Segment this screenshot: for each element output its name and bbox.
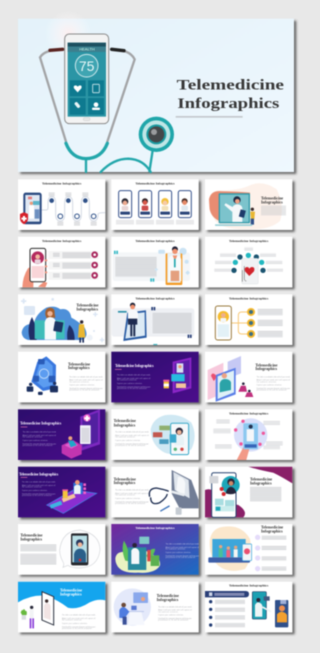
slide 8: doctor quote panel [111,294,199,345]
slide 6: circular icons [205,237,292,287]
slide grid [18,179,292,632]
title [176,77,285,118]
text rows [48,251,98,280]
lavender circle [114,588,151,626]
phone with doctor [71,533,88,565]
cloud and plus icons [155,248,190,275]
bullets [158,605,192,622]
bullets [257,375,291,392]
slide 20: gradient doctor scene [111,524,200,575]
doctor on tablet [118,303,147,341]
heading [261,195,283,205]
heading: Telemedicine Infographics [229,239,269,243]
hand and phone [237,423,258,460]
hero slide: Telemedicine Infographics [18,10,294,172]
heading [60,587,82,597]
quote text [153,313,192,333]
slide 15: hand holding phone with callouts [205,409,292,460]
heading: Infographics [114,422,136,427]
patient [78,320,85,343]
icon: smartphone health app: 75 [79,58,95,74]
phone [215,306,231,340]
slide 13: purple phone and armchair [18,409,105,460]
phone with doctor [252,592,271,619]
icon: chestpiece [139,117,174,172]
stethoscope [149,488,169,504]
captions [116,220,194,225]
heading [76,302,99,311]
heading: Telemedicine [261,525,283,530]
heading: Infographics [20,537,42,542]
blue wave [18,582,105,608]
icon: hand with phone [22,248,47,287]
lavender circle [234,418,267,452]
pink icons [234,420,265,446]
slide 7: doctor with tablet [18,294,105,345]
cream blob [115,549,160,573]
icon ring [231,254,266,273]
slide 16: purple isometric platform [18,467,105,517]
patient [30,606,34,628]
slide 1: phone roadmap [18,179,105,230]
video screen [219,193,250,223]
quote panel [112,308,194,337]
body text [250,487,281,501]
slide 4: hand holding phone [18,237,105,287]
pill bottle [163,380,169,388]
item list [255,535,286,571]
heading: Telemedicine Infographics [19,472,59,477]
slide 3: video call [205,179,292,230]
bullets [117,374,151,390]
speech bubble [60,530,100,568]
slide 14: phone with chat bubbles [111,409,199,460]
bullets [69,375,103,392]
connectors [231,312,247,334]
title: Infographics [177,96,280,112]
plants [123,541,155,561]
heading: Telemedicine [68,361,90,366]
doctor screen [211,368,236,402]
blue blob [151,415,195,455]
icon: phone with heart [242,258,258,284]
heading: Telemedicine Infographics [20,421,62,426]
lavender panels [208,356,241,400]
phone [212,473,240,517]
heading: Telemedicine [255,362,278,367]
isometric tablet [171,470,199,508]
slide 12: isometric video consult [205,352,292,402]
icon: stethoscope tubing [40,10,151,172]
quote marks [114,251,154,282]
heading [261,525,283,534]
heading: Infographics [157,597,179,602]
heading: Telemedicine [20,532,43,537]
heading: Infographics [60,592,82,597]
heading: Telemedicine Infographics [229,584,269,588]
bullets [62,614,96,630]
pen and cup [160,505,182,515]
body text [261,206,286,215]
feature circles [247,308,255,338]
slide 11: purple isometric phone [111,352,199,402]
doctor on phone [166,246,182,285]
slide 10: isometric blue phone [18,352,105,402]
heading [68,361,90,370]
slide 2: four doctors [111,179,199,230]
heading: Telemedicine [114,418,136,423]
labels [214,247,283,272]
phone cards [119,191,191,218]
desk scene [119,592,148,625]
doctor [45,308,63,340]
heading: Telemedicine Infographics [229,297,269,301]
heading: Telemedicine [261,195,283,200]
feature text [258,309,283,337]
slide 24: navy list and phones [205,582,292,632]
heading [114,418,136,427]
screen and doctor [128,537,159,570]
heading: Telemedicine Infographics [135,239,175,243]
laptop scene [208,539,252,563]
heading: Telemedicine [114,476,136,481]
speech bubble and plus icons [21,298,104,342]
bullets [115,489,149,505]
bullets [22,481,56,497]
phone with doctor [170,423,189,455]
slide 19: phone in speech bubble [18,524,105,575]
heading: Telemedicine [60,587,82,592]
heading: Telemedicine [250,476,272,481]
heading: Telemedicine Infographics [135,526,175,530]
portraits [122,198,188,211]
slide 5: doctor on phone with quote [111,237,199,287]
slide 18: magenta curve and phone [205,467,292,517]
heading: Infographics [261,529,283,534]
heading: Telemedicine Infographics [135,182,175,186]
doctor [224,196,246,222]
armchair and patient [62,436,82,459]
plants [29,317,75,340]
background blobs [209,183,282,229]
chat bubbles [153,426,170,444]
phone with cross [80,409,100,451]
seated figures [238,382,253,397]
navy banner [205,591,249,597]
icon: phone with doctor and shield [20,193,42,224]
heading [157,593,179,602]
slide 22: blue wave [18,582,105,632]
body text [20,544,56,565]
tablet with doctor [42,592,54,625]
plant [21,609,27,620]
heading: Telemedicine [157,593,179,598]
slide 9: yellow phone diagram [205,294,292,345]
callout text [213,419,283,449]
heading: Telemedicine Infographics [115,363,154,368]
list [209,600,245,627]
icon: smartphone health app [65,34,109,124]
blue blob [22,307,87,340]
heading: Telemedicine Infographics [42,239,82,243]
heading: Telemedicine [76,302,99,307]
speech bubble [209,476,218,483]
heading [114,476,136,485]
isometric platform [47,480,97,513]
quote text [115,257,157,277]
slide 23: desk consult [111,582,199,632]
bullets [23,431,57,447]
magenta shapes [205,467,292,517]
heading: Telemedicine Infographics [42,182,82,186]
isometric figures [27,382,58,395]
bullets [115,431,149,447]
heading [20,532,43,542]
heading: Infographics [250,480,272,485]
title: Telemedicine [177,77,285,93]
phone with patient [275,600,288,627]
heading: Infographics [261,200,283,205]
heading: Telemedicine Infographics [135,297,175,301]
slide 21: laptop with doctors [205,524,292,575]
heading: Infographics [68,365,90,370]
icon: smartphone health app: HEALTH [79,47,95,52]
heading: Telemedicine Infographics [229,412,269,416]
heading: Infographics [76,306,98,311]
slide 17: stethoscope and tablet [111,467,199,517]
peach blob [210,526,251,571]
heading [255,362,278,371]
bullets [166,543,200,559]
quote marks [151,307,192,338]
laptop [35,320,65,339]
isometric phone [31,356,56,391]
heading: Infographics [255,366,277,371]
quote panel [113,252,190,281]
assistant [250,208,255,225]
roadmap path [42,197,105,221]
isometric phone [171,357,191,393]
heading [250,476,272,485]
heading: Infographics [114,480,136,485]
